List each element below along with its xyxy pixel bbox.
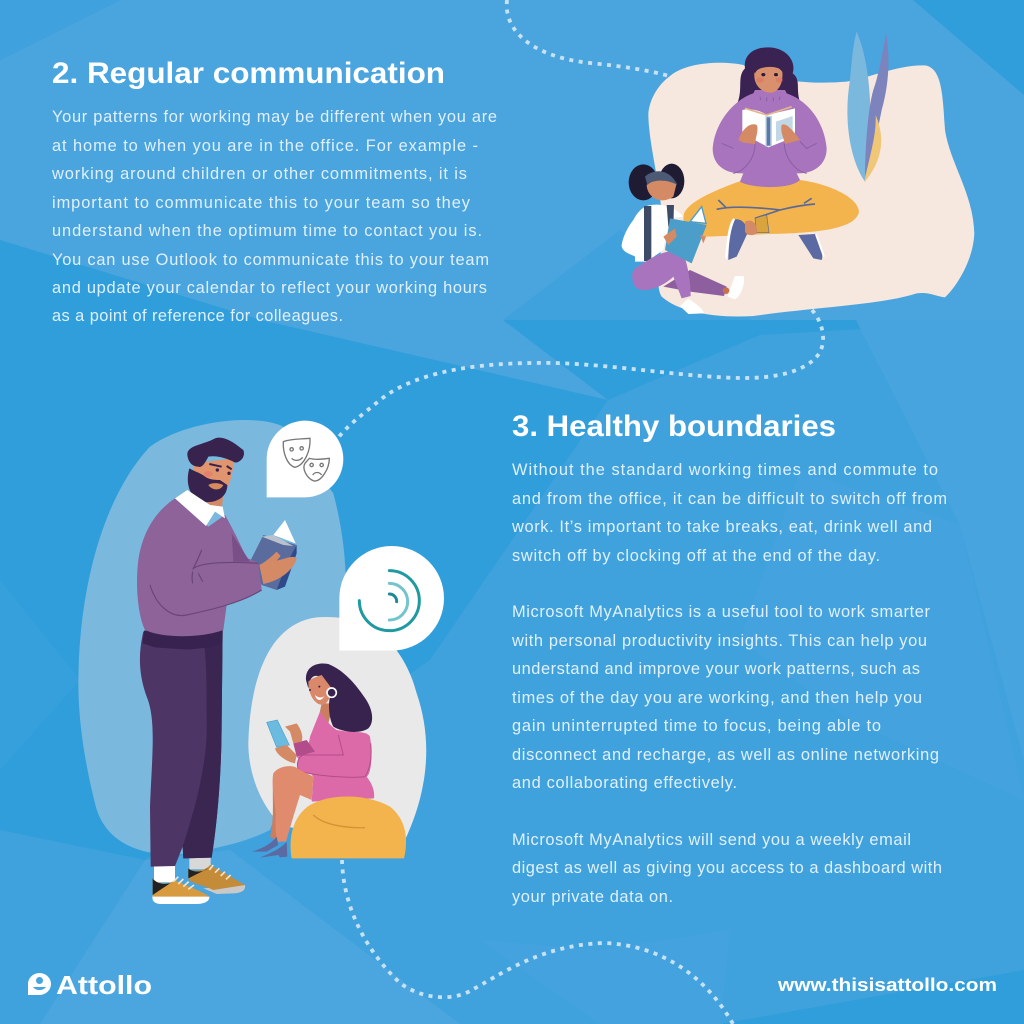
section 3 heading: 3. Healthy boundaries [512, 410, 836, 443]
dotted path: bottom [342, 860, 733, 1024]
section 3 body text: and collaborating effectively. [512, 774, 737, 792]
section 2 heading: 2. Regular communication [52, 57, 445, 90]
cream blob and leaves [648, 32, 974, 317]
section 3 body text: work. It’s important to take breaks, eat, drink well and [511, 518, 932, 536]
website url: www.thisisattollo.com [777, 975, 997, 995]
section 3 body text: your private data on. [512, 888, 673, 906]
section 3 body text: gain uninterrupted time to focus, being able to [512, 717, 881, 735]
section 2 body text: understand when the optimum time to contact you is. [52, 222, 482, 240]
man legs and shoes [140, 629, 245, 904]
section 2 body text: You can use Outlook to communicate this to your team [52, 251, 489, 269]
illustration: woman and child reading [622, 32, 974, 317]
section 3 body text: Microsoft MyAnalytics will send you a weekly email [512, 831, 911, 849]
dotted path: middle [338, 310, 823, 438]
section 3 body text: Microsoft MyAnalytics is a useful tool to work smarter [512, 603, 931, 621]
child with book [622, 164, 744, 314]
section 3 body text: and from the office, it can be difficult to switch off from [512, 490, 947, 508]
section 2 body text: Your patterns for working may be different when you are [52, 108, 497, 126]
illustration: man and woman reading [78, 420, 444, 904]
man upper body [137, 438, 297, 636]
section 3 body text: understand and improve your work patterns, such as [512, 660, 920, 678]
section 3 body text: with personal productivity insights. This can help you [511, 632, 927, 650]
section 2 body text: at home to when you are in the office. For example - [52, 137, 478, 155]
section 2 body text: and update your calendar to reflect your working hours [52, 279, 487, 297]
section 3 body text: times of the day you are working, and then help you [512, 689, 922, 707]
section 3 body text: switch off by clocking off at the end of the day. [512, 547, 880, 565]
section 2 body text: important to communicate this to your team so they [52, 194, 471, 212]
woman on beanbag [252, 663, 406, 858]
section 2 body text [51, 108, 497, 325]
seated woman [683, 47, 859, 260]
section 3 body text: Without the standard working times and commute to [512, 461, 938, 479]
logo: Attollo: Attollo [56, 970, 152, 1000]
logo: Attollo [28, 970, 152, 1000]
section 2 body text: as a point of reference for colleagues. [52, 307, 343, 325]
blobs and speech bubbles [78, 420, 444, 854]
dotted path: top [507, 0, 672, 77]
section 2 body text: working around children or other commitments, it is [51, 165, 467, 183]
section 3 body text: disconnect and recharge, as well as online networking [512, 746, 939, 764]
section 3 body text: digest as well as giving you access to a dashboard with [512, 859, 942, 877]
section 3 body text [511, 461, 947, 906]
